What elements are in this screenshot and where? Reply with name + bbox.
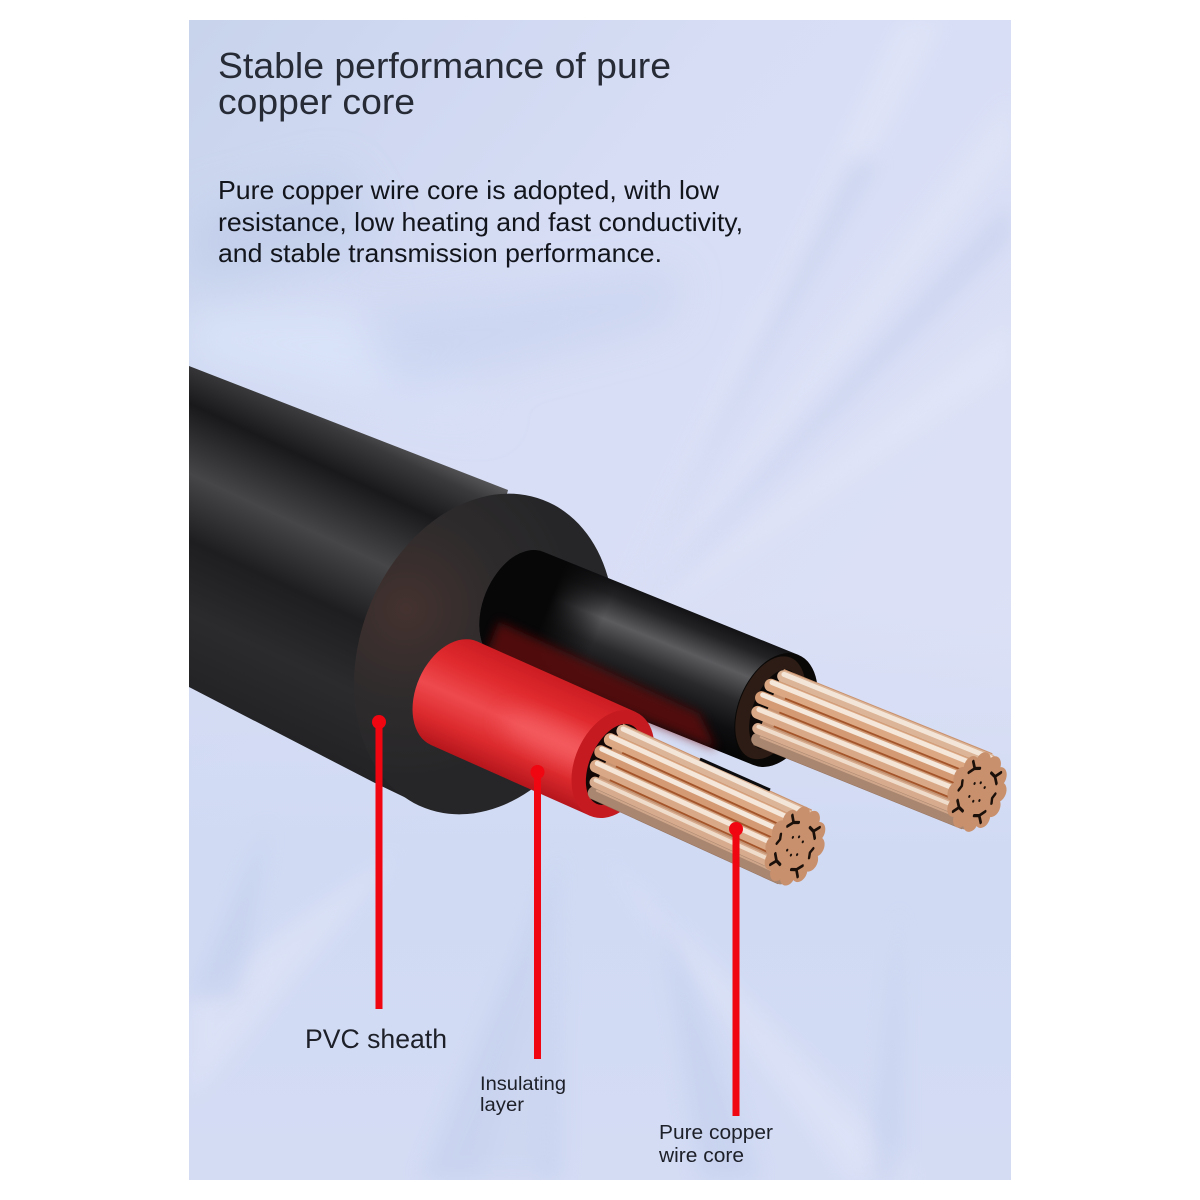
copper core of black wire xyxy=(744,665,993,829)
description text: resistance, low heating and fast conductivity, xyxy=(218,207,743,237)
copper end face of red wire xyxy=(764,806,826,886)
callout line: insulating layer xyxy=(530,765,544,1059)
panel: background with soft light rays xyxy=(189,20,1011,1180)
callout line: PVC sheath xyxy=(372,715,386,1009)
label: pure copper wire core xyxy=(658,1122,773,1167)
sheath cut face xyxy=(354,494,608,814)
description text: and stable transmission performance. xyxy=(218,238,662,268)
title: copper core xyxy=(218,81,415,122)
label: pure copper wire core: wire core xyxy=(658,1145,744,1167)
outer PVC sheath body xyxy=(189,366,508,806)
black insulated wire xyxy=(479,550,817,767)
label: insulating layer: Insulating xyxy=(480,1073,566,1095)
label: insulating layer: layer xyxy=(480,1094,525,1116)
copper end face of black wire xyxy=(947,752,1007,832)
title xyxy=(218,45,671,122)
dark shadow line above red wire copper xyxy=(700,759,770,790)
description text xyxy=(218,175,743,268)
copper core of red wire xyxy=(581,720,812,884)
callout line: pure copper wire core xyxy=(729,822,743,1116)
description text: Pure copper wire core is adopted, with low xyxy=(218,175,719,205)
label: insulating layer xyxy=(480,1073,566,1116)
cable illustration xyxy=(189,366,1018,894)
label: pure copper wire core: Pure copper xyxy=(659,1122,773,1144)
red insulated wire xyxy=(412,639,654,818)
label: PVC sheath: PVC sheath xyxy=(305,1024,447,1054)
title: Stable performance of pure xyxy=(218,45,671,86)
